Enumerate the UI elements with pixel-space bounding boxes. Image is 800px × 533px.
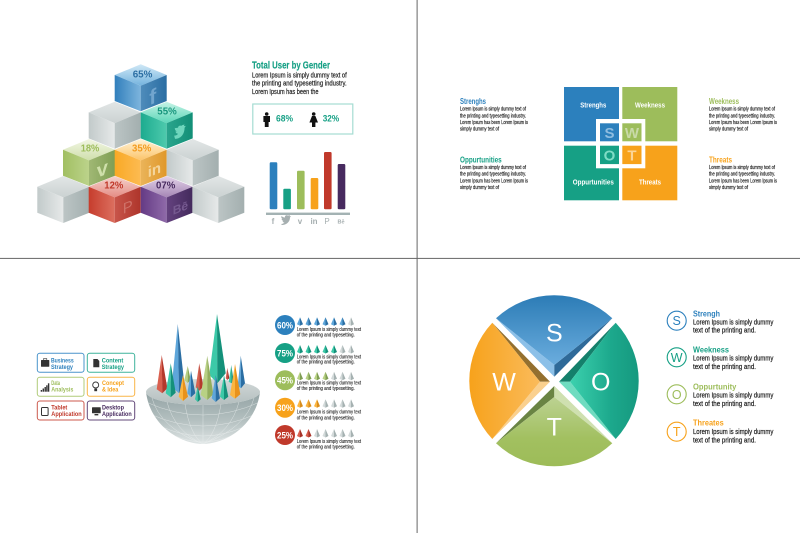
cube: gray upper left bbox=[89, 102, 141, 149]
text block: weekness: Weekness bbox=[709, 97, 739, 106]
text block: weekness bbox=[709, 97, 777, 133]
legend item: oppurtunity bbox=[667, 381, 774, 408]
button: content strategy: Content bbox=[102, 357, 123, 364]
text block: strenghs: Strenghs bbox=[460, 97, 486, 106]
text block: gender description: Lorem Ipsum has been the bbox=[252, 87, 318, 96]
text block: threats: simply dummy text of bbox=[709, 185, 748, 191]
quadrant: strengths bbox=[564, 87, 619, 141]
legend item: oppurtunity: O bbox=[672, 388, 682, 402]
legend item: strengh: Lorem Ipsum is simply dummy bbox=[693, 317, 774, 326]
percentage: male: 68% bbox=[276, 113, 293, 124]
text block: gender description bbox=[252, 70, 347, 96]
row: 25%: Lorem Ipsum is simply dummy text bbox=[297, 439, 362, 445]
text block: weekness: Lorem Ipsum is simply dummy text of bbox=[709, 107, 775, 113]
cube: vimeo 18% bbox=[63, 139, 115, 186]
cube: linkedin 35% bbox=[115, 139, 167, 186]
button: data analysis bbox=[37, 377, 84, 396]
row: 45% bbox=[275, 370, 362, 392]
text block: oppurtunities: Oppurtunities bbox=[460, 156, 502, 165]
text block: oppurtunities: Lorem Ipsum is simply dummy text of bbox=[460, 165, 526, 171]
row: 25% bbox=[275, 425, 362, 451]
icon: man bbox=[263, 112, 270, 127]
center frame with SWOT letters: W bbox=[625, 125, 640, 142]
legend item: threates: text of the printing and. bbox=[693, 436, 756, 445]
row: 30% bbox=[275, 398, 362, 421]
cube: behance 07%: Bē bbox=[173, 198, 188, 218]
heading: total user by gender: Total User by Gender bbox=[252, 60, 330, 72]
quadrant labels: Weekness bbox=[635, 101, 665, 110]
hemisphere bowl bbox=[146, 379, 260, 444]
legend item: strengh bbox=[667, 308, 774, 335]
wedge: W: W bbox=[492, 369, 516, 397]
legend item: threates: Lorem Ipsum is simply dummy bbox=[693, 427, 774, 436]
legend item: threates: Threates bbox=[693, 418, 724, 428]
panel: SWOT pie bbox=[469, 295, 639, 466]
row: 75%: 75% bbox=[277, 348, 293, 359]
cube percentages bbox=[81, 69, 177, 191]
wedge: S: S bbox=[546, 320, 563, 348]
cube: behance 07% bbox=[141, 176, 193, 223]
cube: gray bottom right bbox=[192, 176, 244, 223]
center frame with SWOT letters: S bbox=[604, 125, 615, 142]
cube: pinterest 12%: P bbox=[123, 197, 133, 218]
center frame with SWOT letters bbox=[596, 119, 645, 168]
bar chart: social platforms bbox=[266, 152, 350, 226]
legend item: oppurtunity: Oppurtunity bbox=[693, 381, 737, 391]
button: tablet application: Tablet bbox=[51, 404, 67, 411]
text block: strenghs: simply dummy text of bbox=[460, 127, 499, 133]
legend item: threates bbox=[667, 418, 774, 445]
button: business strategy: Strategy bbox=[51, 364, 73, 371]
text block: oppurtunities: the printing and typesetting industry. bbox=[460, 172, 526, 178]
text block: weekness: the printing and typesetting industry. bbox=[709, 113, 775, 119]
cube: twitter 55% bbox=[141, 102, 193, 149]
row: 30%: 30% bbox=[277, 403, 293, 414]
panel: isometric cube pyramid bbox=[37, 64, 244, 223]
spikes front row bbox=[166, 356, 240, 402]
legend item: threates: T bbox=[673, 425, 681, 439]
button: content strategy bbox=[87, 353, 135, 372]
cube: pinterest 12% bbox=[89, 176, 141, 223]
quadrant labels: Threats bbox=[639, 178, 661, 187]
cube percentages: 35% bbox=[132, 142, 152, 154]
button: desktop application bbox=[87, 401, 135, 420]
button: tablet application bbox=[37, 401, 84, 420]
button: business strategy bbox=[37, 353, 84, 372]
legend item: strengh: Strengh bbox=[693, 308, 720, 318]
chart axis icons: f bbox=[272, 217, 275, 226]
legend item: weekness: Lorem Ipsum is simply dummy bbox=[693, 354, 774, 363]
row: 45%: 45% bbox=[277, 376, 293, 387]
row: 25%: 25% bbox=[277, 430, 293, 441]
legend item: weekness bbox=[667, 345, 774, 371]
row: 75% bbox=[275, 343, 362, 366]
button: tablet application: Application bbox=[51, 411, 82, 418]
text block: strenghs: the printing and typesetting industry. bbox=[460, 113, 526, 119]
legend item: weekness: text of the printing and. bbox=[693, 362, 756, 371]
quadrant: threats bbox=[622, 146, 677, 200]
center frame with SWOT letters: O bbox=[604, 148, 616, 164]
panel: SWOT legend bbox=[667, 308, 774, 445]
text block: threats: Lorem Ipsum has been Lorem Ipsum is bbox=[709, 178, 777, 184]
center frame with SWOT letters: T bbox=[627, 148, 637, 164]
button: concept and idea: Concept bbox=[102, 380, 124, 387]
row: 60% bbox=[275, 315, 362, 338]
row: 45%: Lorem Ipsum is simply dummy text bbox=[297, 380, 362, 386]
icon: woman bbox=[309, 112, 318, 127]
chart axis icons: Bē bbox=[337, 220, 345, 226]
cube: linkedin 35%: in bbox=[148, 160, 161, 181]
cube percentages: 12% bbox=[104, 179, 124, 191]
text block: weekness: simply dummy text of bbox=[709, 127, 748, 133]
legend item: strengh: S bbox=[673, 314, 681, 328]
quadrant labels bbox=[573, 101, 665, 187]
button: desktop application: Desktop bbox=[102, 404, 124, 411]
wedge: O bbox=[559, 323, 639, 439]
quadrant: weakness bbox=[622, 87, 677, 141]
wedge: T: T bbox=[547, 414, 562, 442]
panel: gender split box bbox=[253, 104, 353, 134]
row: 60%: 60% bbox=[277, 320, 293, 331]
cube: facebook 65%: f bbox=[149, 83, 157, 110]
panel: hemisphere with spikes bbox=[146, 314, 260, 444]
row: 75%: Lorem Ipsum is simply dummy text bbox=[297, 354, 362, 360]
panel: category buttons bbox=[37, 353, 135, 420]
row: 25%: of the printing and typesetting. bbox=[297, 445, 355, 451]
panel: SWOT matrix bbox=[564, 87, 677, 200]
legend item: weekness: W bbox=[671, 351, 683, 365]
legend item: strengh: text of the printing and. bbox=[693, 326, 756, 335]
text block: threats: the printing and typesetting industry. bbox=[709, 172, 775, 178]
button: concept and idea bbox=[87, 377, 135, 396]
text block: threats: Threats bbox=[709, 156, 732, 165]
button: data analysis: Data bbox=[51, 380, 60, 387]
text block: gender description: the printing and typesetting industry. bbox=[252, 79, 347, 88]
cube: facebook 65% bbox=[115, 64, 167, 111]
cube percentages: 55% bbox=[157, 105, 177, 117]
quadrant labels: Strenghs bbox=[580, 101, 606, 110]
text block: oppurtunities bbox=[460, 156, 528, 191]
legend item: oppurtunity: Lorem Ipsum is simply dummy bbox=[693, 390, 774, 399]
row: 30%: Lorem Ipsum is simply dummy text bbox=[297, 410, 362, 416]
button: data analysis: Analysis bbox=[51, 386, 74, 393]
button: business strategy: Business bbox=[51, 357, 74, 364]
button: concept and idea: & Idea bbox=[102, 386, 119, 393]
button: content strategy: Strategy bbox=[102, 364, 124, 371]
cube: gray bottom left bbox=[37, 176, 89, 223]
text block: strenghs bbox=[460, 97, 528, 133]
cube percentages: 65% bbox=[133, 69, 153, 81]
chart axis icons: v bbox=[298, 217, 303, 226]
chart axis icons: in bbox=[310, 217, 318, 226]
chart axis icons: P bbox=[324, 217, 330, 226]
row: 45%: of the printing and typesetting. bbox=[297, 386, 355, 392]
wedge: W bbox=[469, 323, 550, 439]
row: 30%: of the printing and typesetting. bbox=[297, 415, 355, 421]
text block: oppurtunities: simply dummy text of bbox=[460, 185, 499, 191]
text block: oppurtunities: Lorem Ipsum has been Lorem Ipsum is bbox=[460, 178, 528, 184]
quadrant labels: Oppurtunities bbox=[573, 178, 614, 187]
text block: gender description: Lorem Ipsum is simply dummy text of bbox=[252, 70, 347, 79]
percentage: female: 32% bbox=[323, 113, 340, 124]
legend item: weekness: Weekness bbox=[693, 345, 729, 355]
text block: strenghs: Lorem Ipsum has been Lorem Ipsum is bbox=[460, 120, 528, 126]
text block: threats bbox=[709, 156, 777, 191]
text block: strenghs: Lorem Ipsum is simply dummy text of bbox=[460, 107, 526, 113]
cube percentages: 07% bbox=[156, 179, 176, 191]
legend item: oppurtunity: text of the printing and. bbox=[693, 399, 756, 408]
spikes back row bbox=[157, 314, 245, 393]
cube percentages: 18% bbox=[81, 142, 100, 154]
quadrant: opportunities bbox=[564, 146, 619, 200]
wedge: S bbox=[496, 295, 612, 377]
text block: weekness: Lorem Ipsum has been Lorem Ipsum is bbox=[709, 120, 777, 126]
row: 60%: of the printing and typesetting. bbox=[297, 332, 355, 338]
wedge: T bbox=[496, 386, 612, 466]
cube: vimeo 18%: v bbox=[97, 156, 108, 183]
chart axis icons bbox=[272, 215, 345, 226]
button: desktop application: Application bbox=[102, 411, 132, 418]
cube: gray middle right bbox=[167, 139, 219, 186]
panel: percentage rows bbox=[275, 315, 362, 451]
wedge: O: O bbox=[591, 369, 610, 397]
row: 60%: Lorem Ipsum is simply dummy text bbox=[297, 327, 362, 333]
text block: threats: Lorem Ipsum is simply dummy text of bbox=[709, 165, 775, 171]
row: 75%: of the printing and typesetting. bbox=[297, 360, 355, 366]
